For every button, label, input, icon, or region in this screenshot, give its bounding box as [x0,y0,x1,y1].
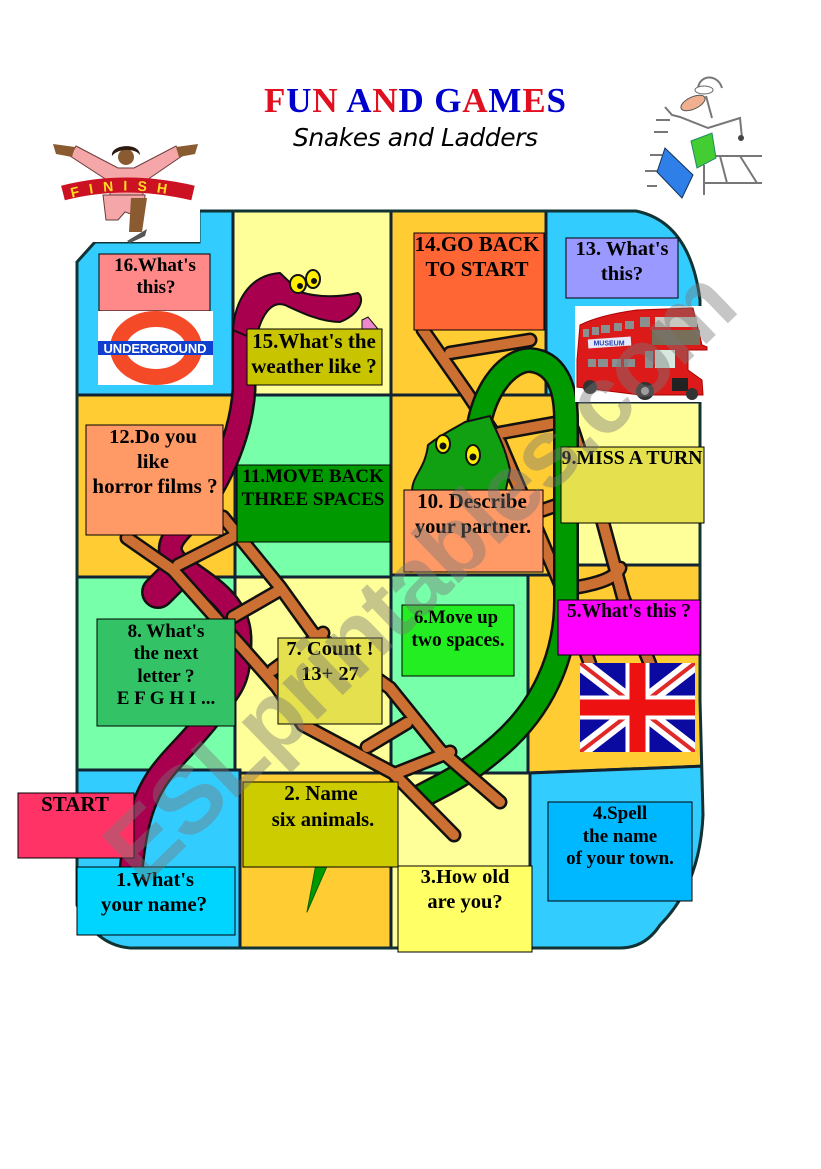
question 8 card: 8. What's [128,621,204,642]
image: underground logo [98,311,213,385]
question 1 card [77,867,235,935]
question 14 card: TO START [426,257,528,281]
green snake [307,360,566,912]
question 2 card: 2. Name [284,781,358,805]
question 9 card [561,447,704,523]
question 3 card: are you? [427,891,503,913]
question 12 card [86,425,223,535]
image: finish runner: F I N I S H [70,180,167,198]
purple snake head [233,273,361,340]
question 11 card [237,465,390,542]
question 12 card: like [137,451,169,473]
image: union jack flag [580,663,695,752]
question 6 card: 6.Move up [414,607,498,628]
snake tongue [362,317,378,329]
image: falling man with dice [645,78,762,198]
question 10 card [404,489,543,572]
question 16 card: this? [136,277,176,298]
snake eyes [290,270,480,465]
question 12 card: horror films ? [92,474,218,498]
start card [18,792,134,858]
ladder right [423,330,650,664]
title: FUN AND GAMES [264,81,566,120]
question 11 card: THREE SPACES [242,489,384,510]
question 3 card [398,866,532,952]
question 5 card [558,600,700,655]
question 8 card: letter ? [137,666,195,687]
purple snake [130,273,361,880]
question 12 card: 12.Do you [109,426,197,448]
question 4 card: of your town. [566,848,674,869]
question 10 card: 10. Describe [417,489,527,513]
image: red bus [575,306,707,402]
game board [77,211,707,950]
image: finish runner [53,144,200,243]
question 6 card [402,605,514,676]
green snake head [412,416,510,494]
question 9 card: 9.MISS A TURN [562,447,703,469]
start card: START [41,792,109,816]
snake tail [307,864,328,912]
board cells [77,211,707,950]
question 4 card: the name [583,826,657,847]
question 15 card: 15.What's the [252,329,376,353]
watermark: ESLprintables.com [83,248,756,903]
question 13 card: this? [601,263,643,285]
question 8 card: E F G H I ... [117,688,215,709]
question 4 card [548,802,692,901]
question 2 card: six animals. [272,809,374,831]
question 4 card: 4.Spell [593,803,647,824]
question 7 card: 7. Count ! [286,638,374,660]
question 10 card: your partner. [415,516,531,538]
question 16 card: 16.What's [114,255,196,276]
image: red bus: MUSEUM [593,340,625,348]
board outline [77,211,703,948]
question 7 card: 13+ 27 [301,663,359,685]
question 5 card: 5.What's this ? [567,601,691,622]
ladder long [127,517,500,835]
question 6 card: two spaces. [411,630,505,651]
question 3 card: 3.How old [421,866,510,888]
question 14 card: 14.GO BACK [415,232,540,256]
question 15 card [247,329,382,385]
question 16 card [99,254,210,311]
question 1 card: 1.What's [116,869,194,891]
question 7 card [278,638,382,724]
question 13 card [566,238,678,298]
question 8 card [97,619,235,726]
question 2 card [243,781,398,867]
question 1 card: your name? [101,892,207,916]
question 13 card: 13. What's [575,238,669,260]
question 11 card: 11.MOVE BACK [242,466,384,487]
question 15 card: weather like ? [251,354,377,378]
subtitle: Snakes and Ladders [293,123,538,152]
question 14 card [414,232,544,330]
question 8 card: the next [134,643,199,664]
image: underground logo: UNDERGROUND [104,341,206,356]
